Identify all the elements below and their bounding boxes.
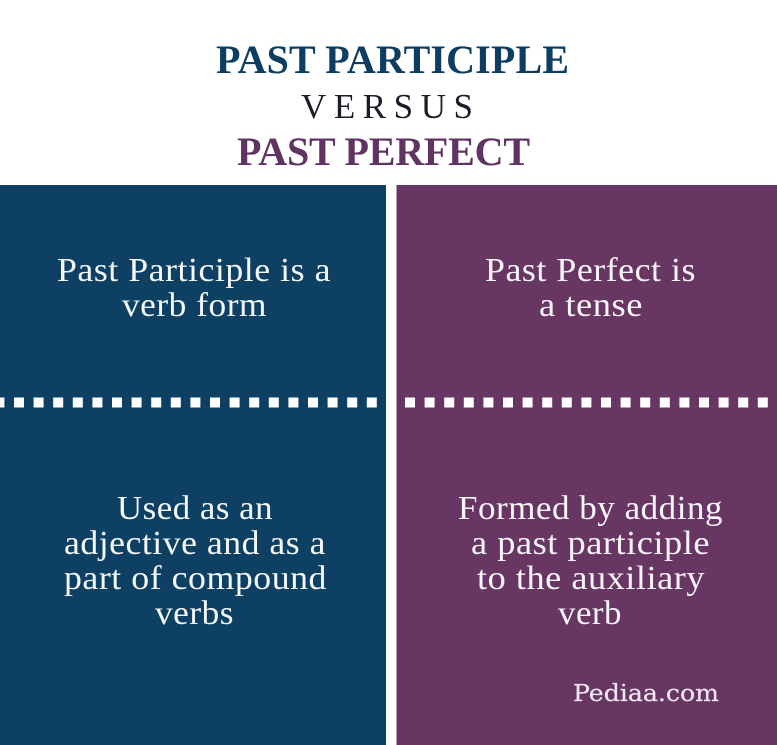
text: usage: part of compound — [64, 560, 327, 597]
logo: pediaa.com: Pediaa.com — [573, 681, 719, 707]
text: formation — [458, 490, 723, 632]
text: usage: Used as an — [117, 490, 273, 527]
panel: past perfect — [396, 185, 777, 745]
text: formation: Formed by adding — [458, 490, 723, 527]
text: tense — [485, 252, 696, 324]
text: verb form: Past Participle is a — [57, 252, 331, 289]
text: usage: verbs — [155, 595, 234, 632]
text: formation: a past participle — [471, 525, 710, 562]
text: formation: verb — [558, 595, 622, 632]
text: verb form — [57, 252, 331, 324]
text: usage: adjective and as a — [64, 525, 326, 562]
dotted divider: right — [405, 398, 768, 408]
heading: versus: VERSUS — [301, 87, 473, 126]
text: usage — [64, 490, 327, 632]
text: formation: to the auxiliary — [477, 560, 705, 597]
title block — [216, 37, 569, 174]
dotted divider: left — [0, 398, 377, 408]
text: tense: a tense — [539, 287, 643, 324]
panel: past participle — [0, 185, 386, 745]
heading: past participle: PAST PARTICIPLE — [216, 37, 569, 82]
heading: past perfect: PAST PERFECT — [237, 129, 530, 174]
text: tense: Past Perfect is — [485, 252, 696, 289]
text: verb form: verb form — [122, 287, 267, 324]
